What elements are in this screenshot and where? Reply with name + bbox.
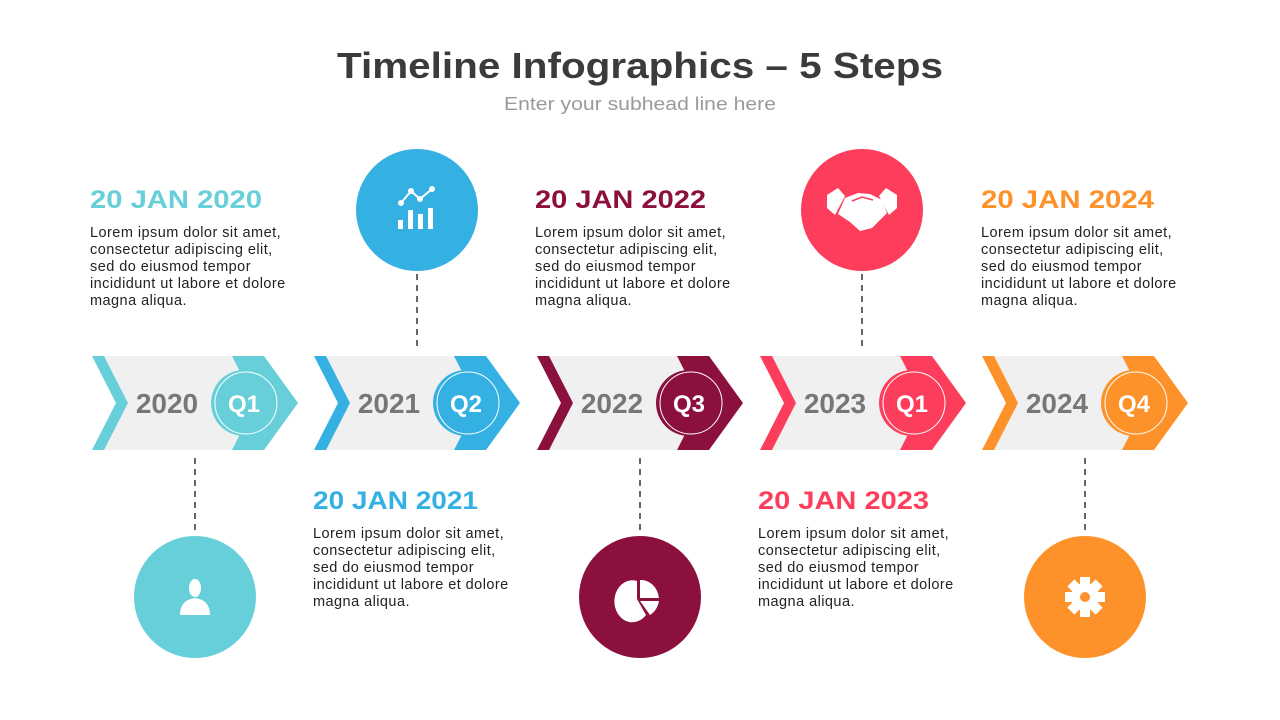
step 4 arrow: 2023 Q1 [760, 356, 966, 450]
text block: 2020: Lorem ipsum dolor sit amet, [90, 225, 281, 241]
icon: handshake circle [801, 149, 923, 271]
text block: 2022: incididunt ut labore et dolore [535, 276, 731, 292]
text block: 2023: sed do eiusmod tempor [758, 560, 919, 576]
text block: 2024: Lorem ipsum dolor sit amet, [981, 225, 1172, 241]
text block: 2024: magna aliqua. [981, 293, 1078, 309]
text block: 2022: 20 JAN 2022 [535, 186, 706, 214]
step 1 arrow: 2020 Q1: Q1 [228, 391, 260, 418]
connectors (dashed) [195, 274, 1085, 532]
text block: 2022: magna aliqua. [535, 293, 632, 309]
step 2 arrow: 2021 Q2 [314, 356, 520, 450]
text block: 2022: sed do eiusmod tempor [535, 259, 696, 275]
step 1 arrow: 2020 Q1 [92, 356, 298, 450]
text block: 2021: Lorem ipsum dolor sit amet, [313, 526, 504, 542]
step 3 arrow: 2022 Q3: 2022 [581, 388, 643, 419]
text block: 2022 [535, 186, 731, 309]
text block: 2024 [981, 186, 1177, 309]
text block: 2021: magna aliqua. [313, 594, 410, 610]
text block: 2022: Lorem ipsum dolor sit amet, [535, 225, 726, 241]
step 3 arrow: 2022 Q3: Q3 [673, 391, 705, 418]
step 1 arrow: 2020 Q1: 2020 [136, 388, 198, 419]
text block: 2023: magna aliqua. [758, 594, 855, 610]
text block: 2020: consectetur adipiscing elit, [90, 242, 273, 258]
text block: 2020: 20 JAN 2020 [90, 186, 262, 214]
step 3 arrow: 2022 Q3 [537, 356, 743, 450]
step 4 arrow: 2023 Q1: Q1 [896, 391, 928, 418]
icon: chart circle [356, 149, 478, 271]
icon: gear circle [1024, 536, 1146, 658]
text block: 2021: consectetur adipiscing elit, [313, 543, 496, 559]
text block: 2023: consectetur adipiscing elit, [758, 543, 941, 559]
icon: user circle [134, 536, 256, 658]
text block: 2024: incididunt ut labore et dolore [981, 276, 1177, 292]
text block: 2023: incididunt ut labore et dolore [758, 577, 954, 593]
text block: 2020: sed do eiusmod tempor [90, 259, 251, 275]
icon: pie chart circle [579, 536, 701, 658]
text block: 2023: Lorem ipsum dolor sit amet, [758, 526, 949, 542]
text block: 2020 [90, 186, 286, 309]
step 4 arrow: 2023 Q1: 2023 [804, 388, 866, 419]
text block: 2020: incididunt ut labore et dolore [90, 276, 286, 292]
text block: 2020: magna aliqua. [90, 293, 187, 309]
step 5 arrow: 2024 Q4: 2024 [1026, 388, 1089, 419]
text block: 2021: incididunt ut labore et dolore [313, 577, 509, 593]
text block: 2021 [313, 487, 509, 610]
text block: 2022: consectetur adipiscing elit, [535, 242, 718, 258]
step 2 arrow: 2021 Q2: 2021 [358, 388, 420, 419]
step 5 arrow: 2024 Q4 [982, 356, 1188, 450]
text block: 2023: 20 JAN 2023 [758, 487, 929, 515]
step 5 arrow: 2024 Q4: Q4 [1118, 391, 1151, 418]
text block: 2024: consectetur adipiscing elit, [981, 242, 1164, 258]
text block: 2024: sed do eiusmod tempor [981, 259, 1142, 275]
text block: 2021: sed do eiusmod tempor [313, 560, 474, 576]
text block: 2024: 20 JAN 2024 [981, 186, 1154, 214]
text block: 2021: 20 JAN 2021 [313, 487, 478, 515]
subhead: Enter your subhead line here [504, 94, 776, 114]
step 2 arrow: 2021 Q2: Q2 [450, 391, 482, 418]
title: Timeline Infographics – 5 Steps [337, 45, 943, 86]
text block: 2023 [758, 487, 954, 610]
